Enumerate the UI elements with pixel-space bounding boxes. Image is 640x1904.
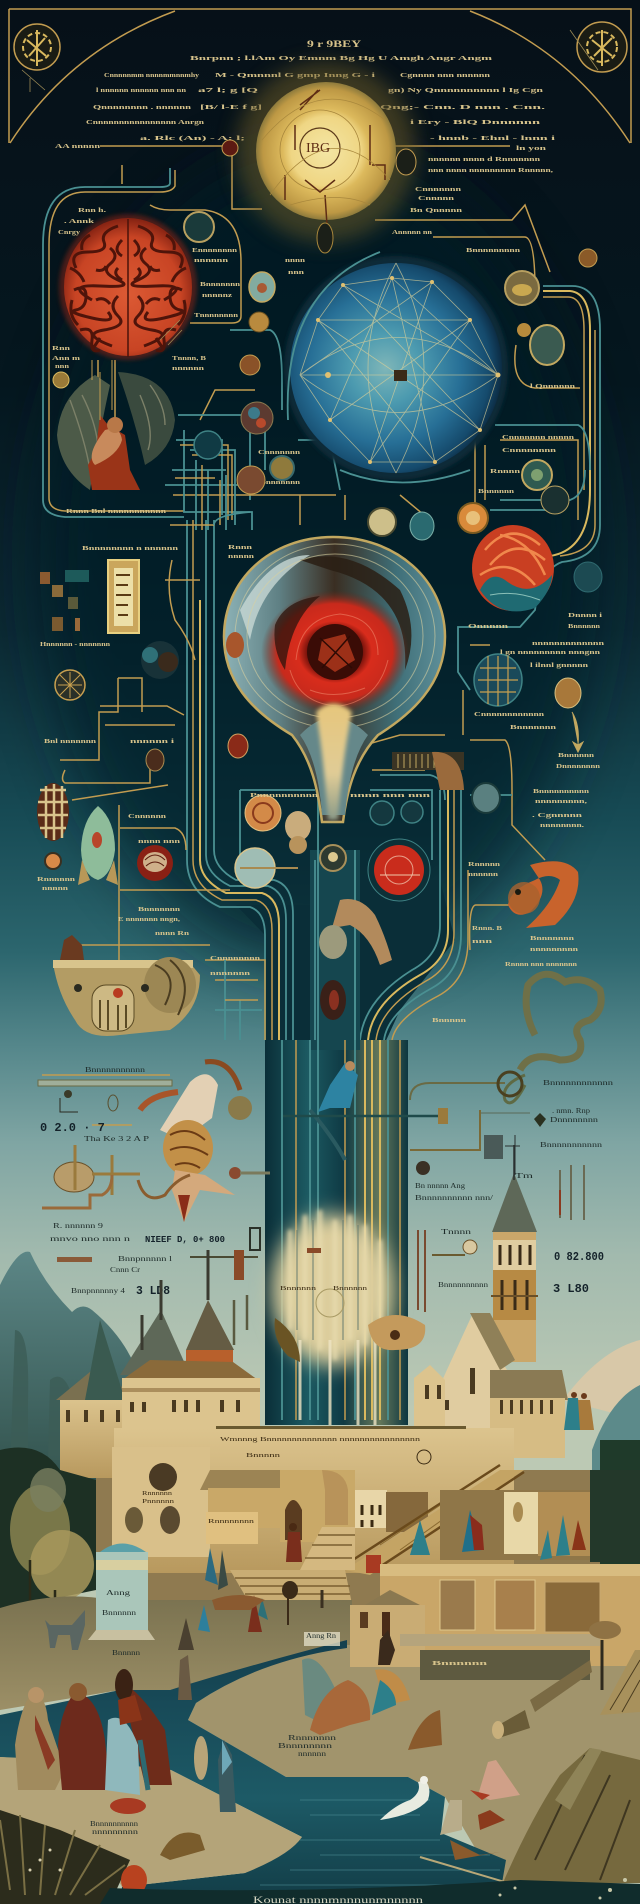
right distant hills xyxy=(563,1340,640,1570)
header text block: gn) Ny Qnnnnnnnnnn l Ig Cgn xyxy=(388,87,544,94)
ornate clasp on lens left xyxy=(226,632,244,658)
labels around mid section: Rnnn. B xyxy=(472,925,503,932)
instruments upper right and left xyxy=(184,212,597,540)
rocks right xyxy=(502,1748,640,1885)
chapel doorway xyxy=(280,1470,355,1542)
sky labels and numbers: Tm xyxy=(515,1172,534,1180)
header text block: Bnrpnn ; l.lAm Oy Emnm Bg Hg U Amgh Angr Angm xyxy=(190,55,493,62)
labels near brain: Tnnnnnnnn xyxy=(194,312,238,319)
header text block: Cnnnnn xyxy=(418,195,455,202)
grey-teal dial xyxy=(472,783,500,813)
sky labels and numbers: Bnnnnnnnnnn xyxy=(438,1281,489,1289)
header text block: nnn nnnn nnnnnnnnn Rnnnnn, xyxy=(428,167,554,174)
sky labels and numbers: Tha Ke 3 2 A P xyxy=(84,1135,149,1143)
red dial button xyxy=(368,839,430,901)
labels near brain: nnnnnz xyxy=(202,292,232,299)
waterfall splash: Bnnnnnn xyxy=(333,1285,368,1292)
standing figure by river xyxy=(178,1655,192,1700)
header text block xyxy=(55,39,555,214)
header text block: - hnnb - Ehnl - lnnn i xyxy=(430,135,555,142)
sky labels and numbers: R. nnnnnn 9 xyxy=(53,1222,104,1230)
labels around mid section: nnnn nnn nnn xyxy=(350,792,431,799)
labels near brain: Bnnnnnnn xyxy=(200,281,241,288)
labels near brain: Ann m xyxy=(52,355,81,362)
right building xyxy=(414,1313,568,1460)
labels around mid section: Cnnnnnnnn xyxy=(210,955,261,962)
sign labels on bank: Bnnnnnnnn xyxy=(278,1742,333,1750)
fallen logs xyxy=(492,1650,640,1739)
header text block: l nnnnnn nnnnnn nnn nn xyxy=(96,87,186,94)
labels around mid section: Bnnnnnnnnnn xyxy=(533,788,590,795)
labels around mid section: nnnnnn xyxy=(468,871,499,878)
sky labels and numbers: 0 82.800 xyxy=(554,1250,604,1264)
brass instrument in sky left xyxy=(42,1145,190,1208)
left palace block: Rnnnnnn xyxy=(142,1490,173,1497)
sky labels and numbers: . nmn. Rnp xyxy=(552,1107,591,1115)
sky labels and numbers: 0 2.0 · 7 xyxy=(40,1121,105,1135)
labels around mid section: Cnnnnnnnnnnnn xyxy=(474,711,545,718)
labels around mid section: Rnnnnn xyxy=(468,861,501,868)
small statue and blue figure xyxy=(194,1736,236,1812)
seated figures on the bank xyxy=(302,1630,442,1750)
labels near brain: Tnnnn, B xyxy=(172,355,207,362)
sky labels and numbers: 3 L80 xyxy=(553,1282,589,1296)
lady and figures by water xyxy=(440,1760,520,1860)
labels near brain: nnn xyxy=(288,269,305,276)
labels around mid section: Rnnn xyxy=(228,544,253,551)
labels around mid section: nnnnnn i xyxy=(130,738,174,745)
labels near brain: Rnnn Bnl nnnnnnnnnnn xyxy=(66,508,167,515)
labels near brain: Bnnnnnn xyxy=(478,488,515,495)
waterfall splash: Bnnnnnn xyxy=(280,1285,317,1292)
labels around mid section: Rnnnnnn xyxy=(37,876,76,883)
labels near brain: Bnnnnnnn xyxy=(260,479,301,486)
gold sphere right xyxy=(555,678,581,708)
labels around mid section: Bnnnnnnn xyxy=(530,935,575,942)
group of robed scholars xyxy=(15,1669,172,1795)
sign labels on bank: Bnnnnnnnnnn xyxy=(90,1820,139,1828)
waterfall splash xyxy=(272,1210,392,1425)
header text block: Qng;- Cnn. D nnn . Cnn. xyxy=(380,104,546,111)
header text block: a7 l; g [Q xyxy=(198,87,258,94)
labels around mid section: Bnnnnnn xyxy=(558,752,595,759)
river xyxy=(0,1640,540,1904)
pipes and fittings in the sky: Bnnnnnnnnnnn xyxy=(85,1066,146,1074)
left palace block xyxy=(112,1447,284,1557)
header text block: [B/ l-E f g] xyxy=(200,104,262,111)
ground sand xyxy=(0,1596,352,1710)
labels around mid section: nnnnnnnn. xyxy=(540,822,585,829)
right tower xyxy=(491,1145,538,1362)
header text block: Qnnnnnnnn . nnnnnn xyxy=(93,104,192,111)
labels around mid section: Bnnnnnnnn n nnnnnn xyxy=(82,545,179,552)
sun disc with diagrams xyxy=(256,82,396,240)
globe with constellation net xyxy=(284,256,508,480)
left palace block: Pnnnnnn xyxy=(142,1498,175,1505)
header text block: Cnnnnnmm nnnnmmnnmhy xyxy=(104,72,200,79)
labels near brain: Cnrgy xyxy=(58,229,81,236)
labels around mid section: Hnnnnnn - nnnnnnn xyxy=(40,641,110,648)
sky labels and numbers: Tnnnn xyxy=(441,1228,472,1236)
sky labels and numbers: NIEEF D, 0+ 800 xyxy=(145,1235,225,1245)
labels around mid section xyxy=(37,544,605,1024)
sky labels and numbers: Bnnpnnnnny 4 xyxy=(71,1287,126,1295)
labels near brain: nnnnnn xyxy=(172,365,205,372)
labels near brain: Rnnnn xyxy=(490,468,521,475)
sky labels and numbers: 3 LD8 xyxy=(136,1284,170,1298)
sky labels and numbers xyxy=(40,1079,614,1298)
central plaza wall with inscription xyxy=(114,1426,514,1573)
red medallion xyxy=(137,845,173,881)
terrace figures xyxy=(205,1510,586,1590)
labels around mid section: Rnnnn nnn nnnnnnn xyxy=(505,961,577,968)
labels near brain xyxy=(52,207,576,515)
fish creature xyxy=(508,861,579,928)
left castle xyxy=(56,1250,260,1478)
labels near brain: Bnnnnnnnnn xyxy=(466,247,521,254)
sign labels on bank: Bnnnnn xyxy=(112,1649,141,1657)
pendant under sun xyxy=(317,223,333,253)
labels near brain: l Qnnnnnn xyxy=(530,383,576,390)
central plaza wall with inscription: Bnnnnn xyxy=(246,1452,281,1459)
icon: sun glow xyxy=(236,62,416,242)
small cream building xyxy=(355,1490,428,1532)
labels near brain: nnn xyxy=(55,363,69,370)
dark backing behind converging pipes xyxy=(236,850,455,1045)
sign labels on bank: Rnnnnnnn xyxy=(288,1734,337,1742)
sky labels and numbers: Cnnn Cr xyxy=(110,1266,141,1274)
labels around mid section: Dnnnnnnnn xyxy=(556,763,600,770)
labels near brain: Rnn h. xyxy=(78,207,107,214)
grey horse xyxy=(45,1610,85,1650)
header text block: a. Rlc (An) - A; l; xyxy=(140,135,245,142)
red scarf on island xyxy=(110,1798,146,1814)
green bulb flask xyxy=(78,806,118,885)
small red creature xyxy=(121,1865,147,1895)
front sand island xyxy=(0,1757,302,1887)
labels near brain: Cnnnnnnn xyxy=(258,449,301,456)
sky labels and numbers: Dnnnnnnnn xyxy=(550,1116,599,1124)
main lens with vortex eye xyxy=(224,537,445,822)
left palace block: Rnnnnnnnn xyxy=(208,1518,255,1525)
sign labels on bank: nnnnnn xyxy=(298,1750,327,1758)
labels around mid section: nnnnnnnnnnnnn xyxy=(532,640,605,647)
vertical pipe bundles around the lens xyxy=(60,512,545,1040)
labels near brain: nnnnnn xyxy=(194,257,229,264)
dark bottom band xyxy=(100,1880,640,1904)
circuit pipes upper xyxy=(43,146,600,690)
header text block: 9 r 9BEY xyxy=(307,39,362,49)
terrace facade xyxy=(350,1564,640,1690)
turquoise cylinder tower: Bnnnnnn xyxy=(102,1609,137,1617)
grid orb right of lens xyxy=(474,654,522,706)
upper right building on terrace xyxy=(440,1470,640,1562)
labels around mid section: Bnl nnnnnnn xyxy=(44,738,97,745)
building base filling behind the palace xyxy=(96,1470,600,1650)
couple on right stair top xyxy=(564,1392,594,1430)
labels near brain: Annnnn nn xyxy=(392,229,432,236)
lion resting on island xyxy=(160,1832,205,1860)
labels around mid section: nnn xyxy=(472,938,493,945)
labels around mid section: Bnnnnn xyxy=(432,1017,467,1024)
cage capsule xyxy=(37,783,69,841)
labels around mid section: l gn nnnnnnnnn nnngnn xyxy=(500,649,601,656)
labels around mid section: nnnn nnn xyxy=(138,838,181,845)
trees left xyxy=(0,1448,96,1610)
sun disc with diagrams: IBG xyxy=(306,141,330,156)
header text block: nnnnnn nnnn d Rnnnnnnn xyxy=(428,156,541,163)
sky labels and numbers: Bnnnnnnnnnn nnn/ xyxy=(415,1194,493,1202)
orange orb with handle xyxy=(45,853,61,869)
swan xyxy=(380,1776,429,1820)
fireball orb xyxy=(472,525,554,611)
sky labels and numbers: Bnnnnnnnnnnnn xyxy=(543,1079,614,1087)
header text block: Cgnnnn nnn nnnnnn xyxy=(400,72,491,79)
labels around mid section: nnnnn xyxy=(42,885,69,892)
small teal orb right of fireball xyxy=(574,562,602,592)
sky labels and numbers: Bnnnnnnnnnnn xyxy=(540,1141,603,1149)
diagonal staircase xyxy=(345,1465,524,1575)
header text block: M - Qmnnnl G gmp Inng G - i xyxy=(215,72,375,79)
sign labels on bank: Anng Rn xyxy=(306,1632,337,1640)
sky labels and numbers: mnvo nno nnn n xyxy=(50,1235,131,1243)
gold inscription card xyxy=(108,560,139,633)
sky labels and numbers: Bn nnnnn Ang xyxy=(415,1182,466,1190)
ornate bowl xyxy=(53,957,200,1036)
labels around mid section: Bnnnnnn xyxy=(568,623,600,630)
grass foreground xyxy=(0,1810,130,1904)
oar across water xyxy=(420,1857,515,1885)
labels near brain: Rnn xyxy=(52,345,71,352)
central plaza wall with inscription: Wmnnng Bnnnnnnnnnnnnnn nnnnnnnnnnnnnnnn xyxy=(220,1436,421,1443)
tiny figure above bowl xyxy=(60,935,84,960)
small ring right of sun xyxy=(396,149,416,175)
small heart icon left of sun xyxy=(222,140,238,156)
header text block: Bn Qnnnnn xyxy=(410,207,463,214)
ornamental top frame xyxy=(9,9,631,143)
labels around mid section: Pnnnnnnnnnn xyxy=(250,792,319,799)
bushes bottom right xyxy=(498,1878,627,1900)
ornate panel right of neck xyxy=(392,752,464,790)
turquoise cylinder tower: Anng xyxy=(106,1589,131,1597)
labels around mid section: Cnnnnnn xyxy=(128,813,167,820)
corner emblem right xyxy=(570,22,627,72)
pipes and fittings in the sky xyxy=(38,1066,584,1345)
header text block: Cnnnnnnnnnnnnnnnn Anrgn xyxy=(86,119,205,126)
labels around mid section: nnnnnnnnn xyxy=(530,946,579,953)
labels near brain: . Annk xyxy=(64,218,95,225)
small orb left of winged figure xyxy=(53,372,69,388)
crouched creatures at splash xyxy=(275,1315,425,1362)
sky labels and numbers: Bnnpnnnnn l xyxy=(118,1255,172,1263)
labels around mid section: nnnn Rn xyxy=(155,930,190,937)
header text block: ln yon xyxy=(516,145,547,152)
labels around mid section: l ilnnl gnnnnn xyxy=(530,662,589,669)
labels around mid section: Bnnnnnnn xyxy=(510,724,557,731)
corner emblem left xyxy=(14,24,60,92)
labels around mid section: Onnnnn xyxy=(468,623,509,630)
mid figures near cylinder xyxy=(178,1581,322,1650)
header text block: AA nnnnn xyxy=(55,143,101,150)
terrace facade: Bnnnnnn xyxy=(432,1660,488,1667)
labels near brain: Ennnnnnnn xyxy=(192,247,238,254)
instruments left of lens xyxy=(40,570,248,771)
header text block: i Ery - BlQ Dnnnnnn xyxy=(410,119,541,126)
sign labels on bank: nnnnnnnnn xyxy=(92,1828,139,1836)
labels near brain: Cnnnnnnnn xyxy=(502,447,557,454)
clown figure with lion head xyxy=(140,1062,252,1222)
orb row beside neck xyxy=(235,795,423,888)
labels around mid section: nnnnn xyxy=(228,553,255,560)
brain xyxy=(59,214,197,360)
labels around mid section: nnnnnnnnn, xyxy=(535,798,588,805)
left mountains xyxy=(0,1252,140,1520)
blue robed figure on column xyxy=(310,1061,358,1160)
labels around mid section: Bnnnnnnn xyxy=(138,906,181,913)
labels near brain: Cnnnnnnn nnnnn xyxy=(502,434,575,441)
winged figure below brain xyxy=(57,360,175,490)
middle sand bank xyxy=(188,1645,640,1890)
dark central haze xyxy=(40,150,600,970)
labels around mid section: Dnnnn i xyxy=(568,612,602,619)
snake coil xyxy=(504,974,601,1103)
sign labels on bank xyxy=(90,1632,340,1836)
labels around mid section: . Cgnnnnn xyxy=(532,812,583,819)
creature and stone on central column xyxy=(319,899,392,1020)
red lower wall block xyxy=(366,1555,381,1573)
main staircase xyxy=(230,1523,355,1604)
turquoise cylinder tower xyxy=(88,1544,155,1640)
arc outline around globe xyxy=(288,252,470,482)
arrow pointing down xyxy=(572,712,583,752)
central column of pipes xyxy=(265,850,408,1425)
labels around mid section: E nnnnnnn nngn, xyxy=(118,916,180,923)
labels near brain: nnnn xyxy=(285,257,306,264)
header text block: Cnnnnnnn xyxy=(415,186,462,193)
labels around mid section: nnnnnnn xyxy=(210,970,251,977)
